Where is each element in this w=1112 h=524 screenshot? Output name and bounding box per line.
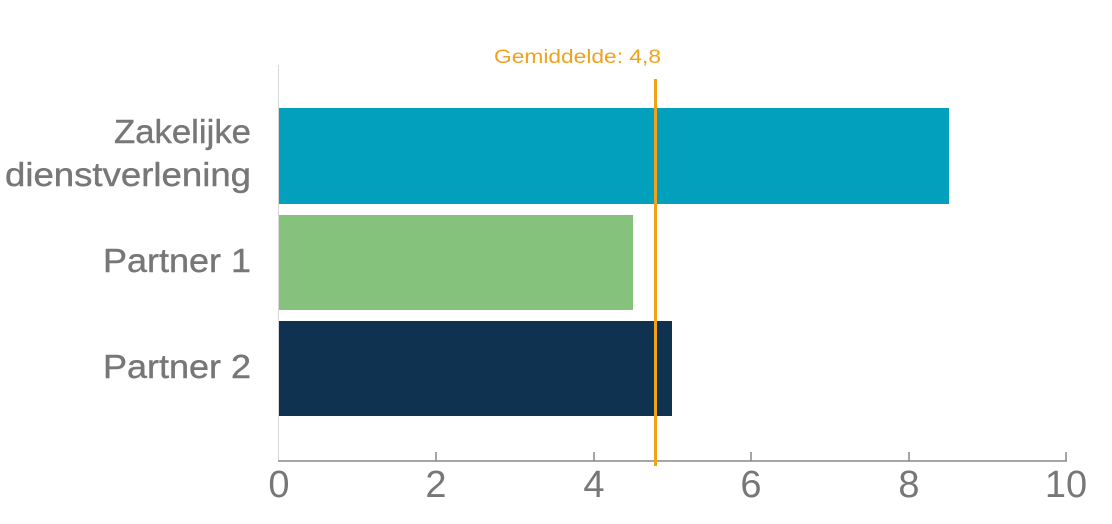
category labels: dienstverlening [5,156,251,193]
average line [654,79,657,466]
x axis tick labels [268,464,1087,506]
category labels: Partner 1 [103,242,251,279]
average label: Gemiddelde: 4,8 [494,47,661,68]
category labels [5,113,251,385]
category labels: Zakelijke [114,113,251,150]
bar: Partner 1 [279,215,633,310]
category labels: Partner 2 [103,348,251,385]
x axis tick labels: 10 [1045,464,1087,506]
x axis tick labels: 6 [740,464,762,506]
x axis tick labels: 2 [425,464,447,506]
x axis tick labels: 0 [268,464,290,506]
x axis tick labels: 4 [583,464,605,506]
bar: Zakelijke dienstverlening [279,108,949,204]
x axis tick labels: 8 [898,464,920,506]
bar: Partner 2 [279,321,672,416]
x axis [278,452,1067,461]
y axis line [278,65,280,461]
